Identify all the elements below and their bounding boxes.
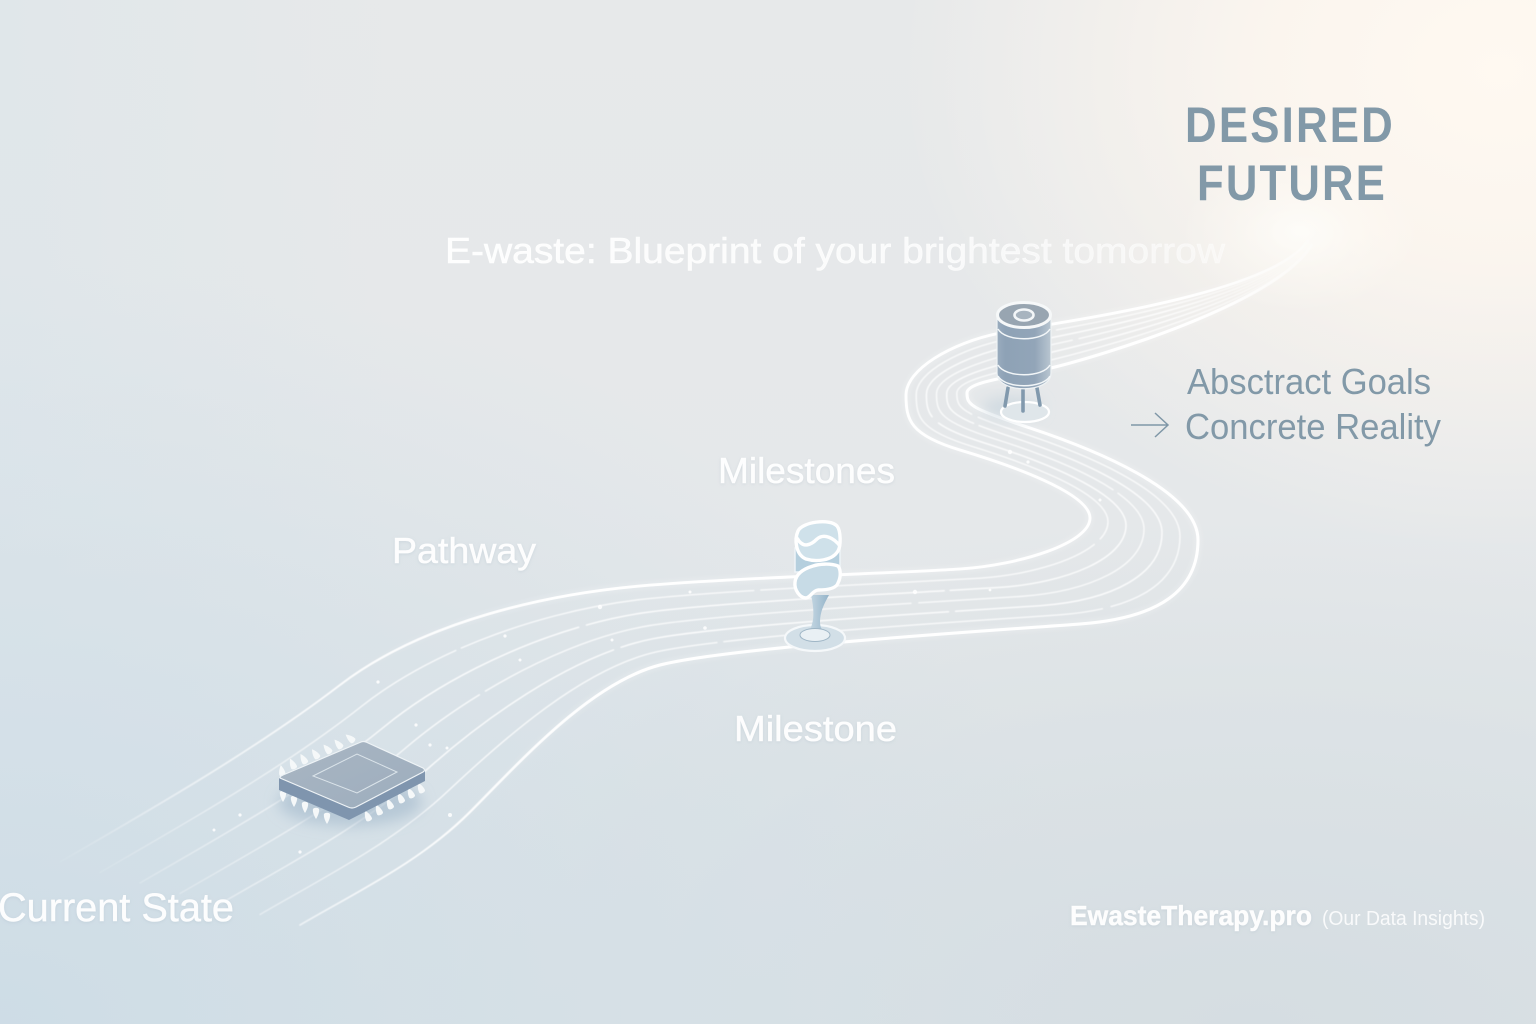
arrow [1131, 413, 1168, 437]
pathway bright edges [407, 280, 1256, 803]
pedestal stem [806, 595, 829, 634]
milestones label: Milestones [718, 450, 895, 491]
lane line 3 [180, 300, 1216, 894]
chip top pins [278, 732, 356, 777]
capacitor body [997, 318, 1051, 389]
upper ribbon [796, 522, 840, 560]
chip side [279, 770, 425, 820]
brand note: (Our Data Insights) [1322, 908, 1485, 930]
capacitor legs [1005, 388, 1040, 411]
pedestal foot [800, 628, 830, 642]
lower ribbon [795, 564, 840, 598]
icon: capacitor cylinder milestone [982, 302, 1051, 422]
middle ribbon [795, 548, 840, 572]
lower edge bright [483, 295, 1246, 797]
pathway label: Pathway [392, 530, 536, 571]
capacitor base [1001, 402, 1049, 422]
future: FUTURE [1197, 155, 1387, 211]
capacitor bands [998, 329, 1050, 386]
milestone label: Milestone [734, 708, 897, 749]
brand credit [1070, 900, 1485, 931]
capacitor lid ring [1014, 310, 1034, 320]
capacitor shadow [982, 396, 1042, 420]
lane line 2 [150, 291, 1230, 878]
brand name: EwasteTherapy.pro [1070, 900, 1312, 931]
lower edge glow [300, 245, 1312, 925]
upper edge line [108, 610, 502, 834]
subtitle: E-waste: Blueprint of your brightest tomorrow [445, 230, 1226, 271]
concrete reality label: Concrete Reality [1185, 406, 1441, 447]
icon: swirl pedestal milestone [785, 522, 845, 651]
pathway road [108, 291, 1232, 926]
pathway particles [212, 450, 1102, 854]
capacitor lid [998, 302, 1050, 328]
lane line 4 [220, 296, 1232, 904]
desired future heading [1185, 97, 1395, 211]
abstract goals callout [1185, 361, 1441, 447]
pedestal base [785, 625, 845, 651]
desired: DESIRED [1185, 97, 1395, 153]
chip top face [280, 742, 424, 808]
icon: microchip [278, 732, 426, 826]
upper edge bright [414, 284, 1228, 640]
chip inner square [313, 754, 397, 793]
chip bottom pins [280, 781, 426, 824]
abstract goals label: Absctract Goals [1187, 361, 1431, 402]
chip shadow [278, 778, 422, 826]
lower edge line [299, 715, 571, 926]
lane line 1 [145, 296, 1204, 846]
upper edge glow [340, 240, 1308, 685]
upper ribbon swirl [797, 536, 840, 546]
lane line 5 [260, 311, 1206, 915]
current state label: Current State [0, 886, 234, 930]
